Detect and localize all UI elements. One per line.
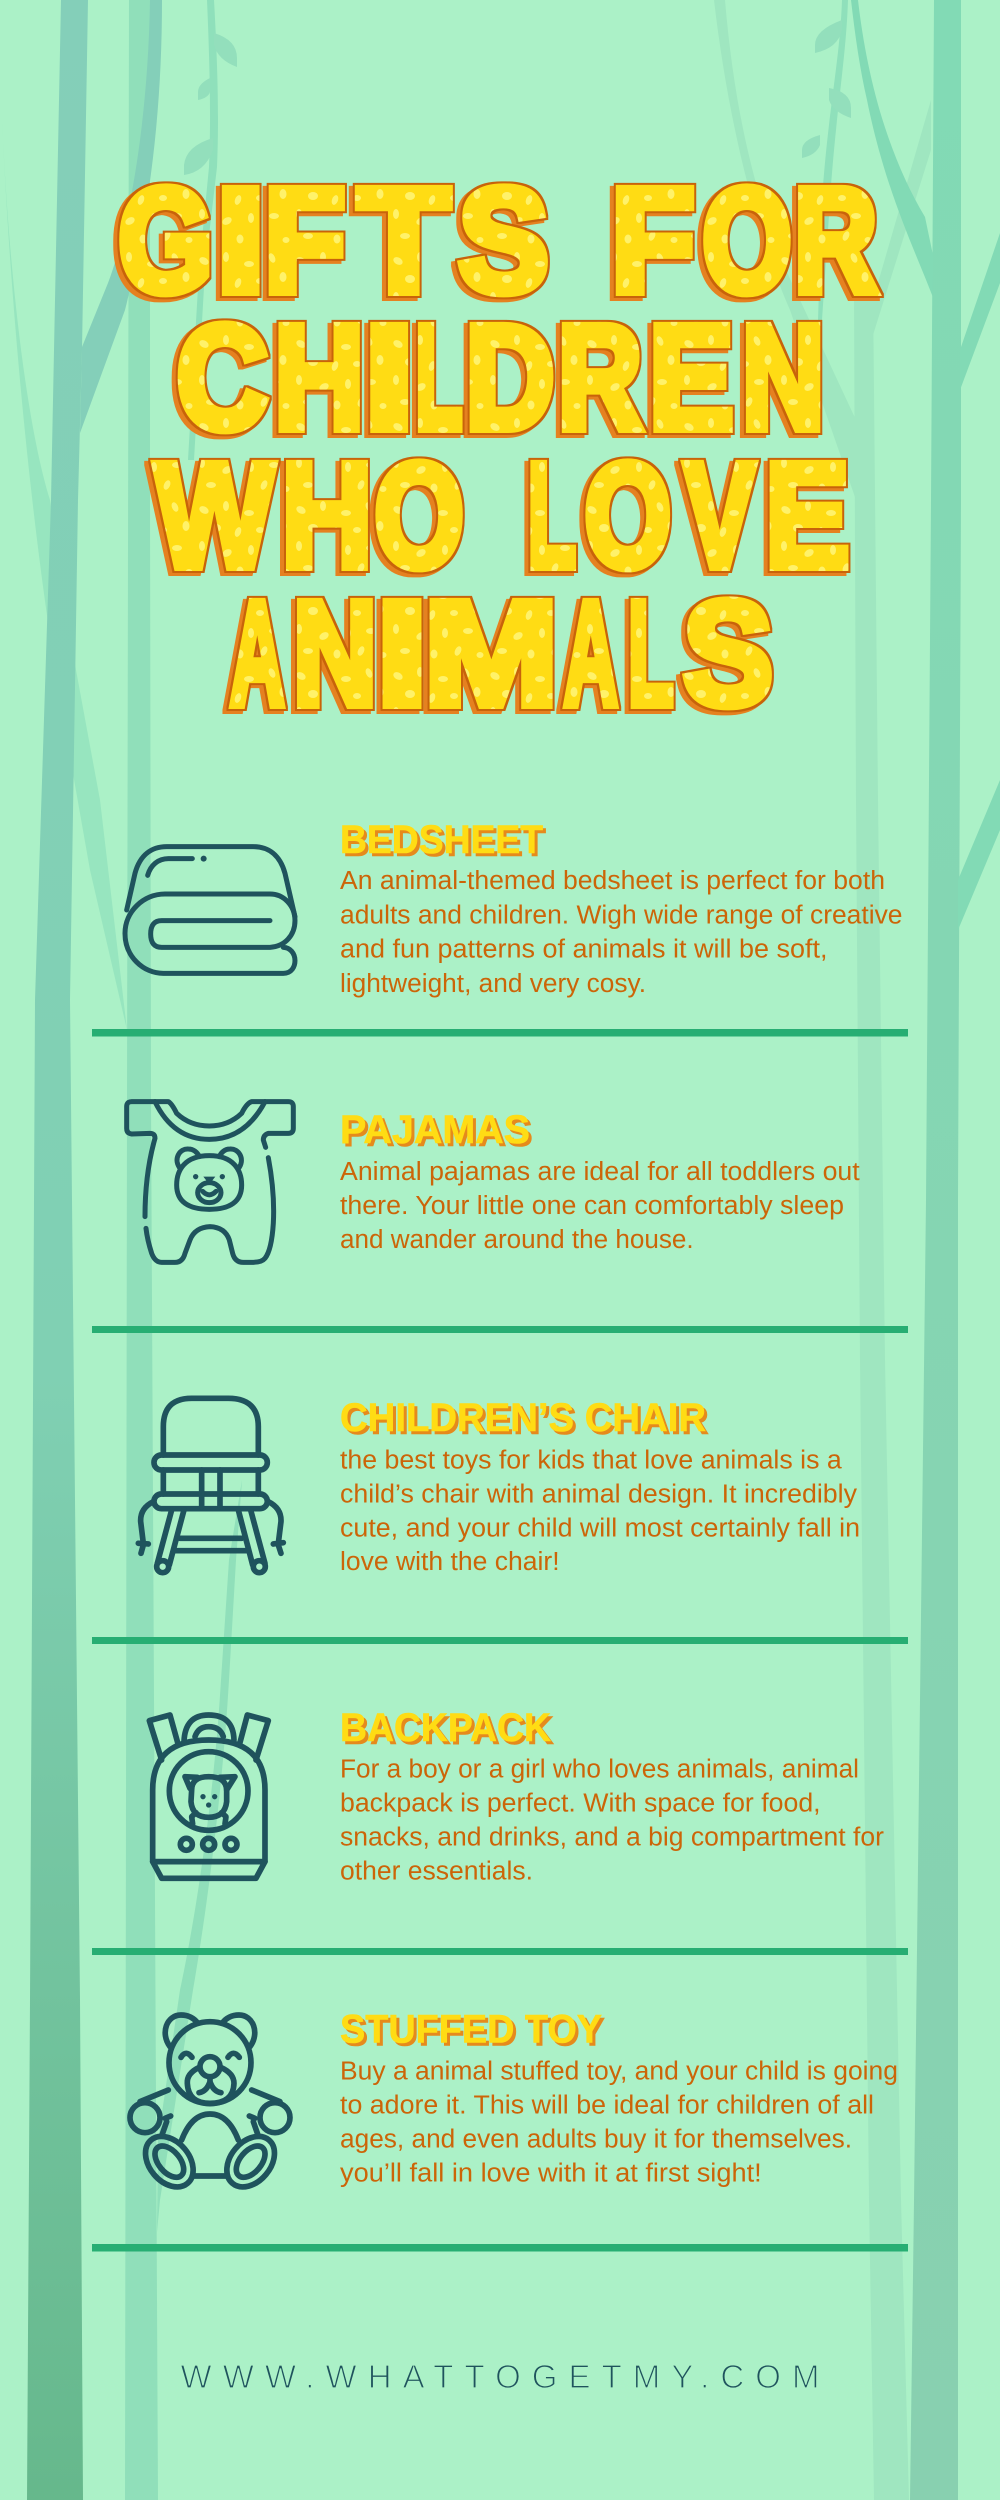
description: Buy a animal stuffed toy, and your child is going — [340, 2057, 898, 2085]
description: and wander around the house. — [340, 1226, 694, 1254]
panel: backpack — [149, 1706, 891, 1885]
right curved branch — [851, 0, 934, 300]
heading: CHILDREN’S CHAIR — [340, 1396, 706, 1440]
footer url: WWW.WHATTOGETMY.COM — [180, 2358, 820, 2395]
title: G — [118, 159, 213, 323]
heading: STUFFED TOY — [340, 2008, 602, 2052]
description: and fun patterns of animals it will be soft, — [340, 936, 828, 964]
title: O — [585, 434, 671, 598]
title: N — [293, 572, 377, 736]
left curved branch — [80, 0, 162, 433]
description: cute, and your child will most certainly fall in — [340, 1515, 860, 1543]
right side branches — [958, 233, 1000, 930]
thin left branch — [2, 117, 127, 1030]
title: N — [742, 296, 824, 460]
description: to adore it. This will be ideal for children of all — [340, 2091, 874, 2119]
description: backpack is perfect. With space for food, — [340, 1790, 821, 1818]
title: L — [528, 434, 576, 598]
description: there. Your little one can comfortably sleep — [340, 1192, 844, 1220]
title: F — [611, 159, 695, 323]
title: I — [364, 296, 414, 460]
icon: baby romper — [127, 1102, 293, 1262]
panel: children's chair — [138, 1396, 867, 1576]
title: W — [156, 434, 274, 598]
lower slim branch — [157, 1480, 242, 2232]
left second trunk — [125, 0, 158, 2500]
icon: child's chair — [138, 1398, 283, 1573]
title: R — [558, 296, 642, 460]
title: M — [424, 572, 558, 736]
icon: pet backpack — [149, 1715, 268, 1878]
title: A — [230, 572, 284, 736]
title: H — [274, 296, 364, 460]
left main trunk — [27, 0, 88, 2500]
panel: pajamas — [127, 1102, 867, 1262]
icon: folded bedsheet — [125, 847, 295, 973]
title: E — [649, 296, 733, 460]
description: the best toys for kids that love animals is a — [340, 1446, 843, 1474]
title: F — [264, 159, 345, 323]
description: adults and children. Wigh wide range of creative — [340, 902, 902, 930]
title: E — [766, 434, 849, 598]
left vine leaves — [184, 33, 237, 175]
faint right trunk — [854, 290, 909, 2500]
title: R — [794, 159, 877, 323]
title: L — [628, 572, 673, 736]
description: Animal pajamas are ideal for all toddlers out — [340, 1158, 860, 1186]
title: C — [177, 296, 268, 460]
panel: bedsheet — [125, 818, 910, 998]
right vine — [818, 0, 848, 320]
title: T — [358, 159, 449, 323]
title: I — [376, 572, 428, 736]
title: A — [564, 572, 618, 736]
panel: stuffed toy — [130, 2008, 905, 2196]
description: other essentials. — [340, 1857, 533, 1885]
title: O — [702, 159, 792, 323]
faint right branches — [714, 0, 931, 500]
description: lightweight, and very cosy. — [340, 970, 646, 998]
right main trunk — [910, 0, 961, 2500]
title: I — [216, 159, 265, 323]
heading: BACKPACK — [340, 1706, 551, 1750]
description: love with the chair! — [340, 1548, 560, 1576]
title: V — [684, 434, 755, 598]
icon: teddy bear — [130, 2015, 290, 2196]
title: S — [684, 572, 773, 736]
description: you’ll fall in love with it at first sight! — [340, 2160, 762, 2188]
title: D — [466, 296, 554, 460]
description: child’s chair with animal design. It incredibly — [340, 1480, 857, 1508]
description: snacks, and drinks, and a big compartment for — [340, 1824, 885, 1852]
title: O — [375, 434, 464, 598]
description: For a boy or a girl who loves animals, animal — [340, 1756, 859, 1784]
right vine leaves — [802, 20, 851, 158]
heading: PAJAMAS — [340, 1108, 530, 1152]
heading: BEDSHEET — [340, 818, 543, 862]
title: L — [415, 296, 462, 460]
left vine — [188, 0, 218, 460]
title: S — [459, 159, 549, 323]
description: An animal-themed bedsheet is perfect for both — [340, 867, 885, 895]
description: ages, and even adults buy it for themselves. — [340, 2125, 852, 2153]
title: H — [282, 434, 372, 598]
